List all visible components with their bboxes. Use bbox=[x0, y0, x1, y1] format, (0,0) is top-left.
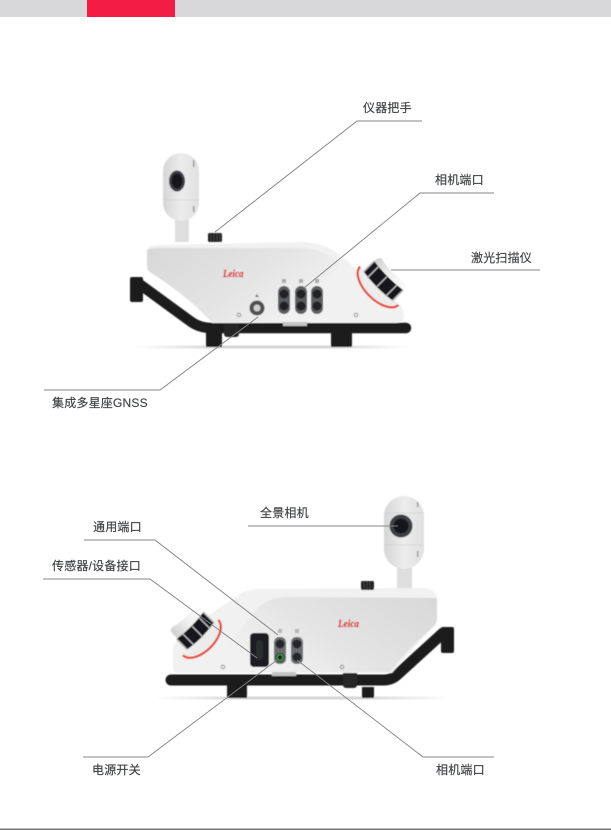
Leica logo: Leica bbox=[222, 269, 244, 280]
footer rule bbox=[0, 828, 611, 830]
callout: 传感器/设备接口 bbox=[43, 558, 257, 658]
callout: 相机端口 (top) bbox=[304, 173, 494, 288]
callout: 仪器把手 bbox=[215, 101, 422, 232]
sensor port bbox=[250, 633, 269, 667]
GNSS port bbox=[250, 294, 264, 316]
ports bbox=[274, 629, 303, 664]
callout: 传感器/设备接口: 传感器/设备接口 bbox=[52, 558, 141, 573]
knob bbox=[208, 233, 222, 242]
device: front view of instrument bbox=[155, 496, 454, 700]
panoramic camera bbox=[163, 153, 199, 242]
callout: 集成多星座GNSS: 集成多星座GNSS bbox=[52, 395, 148, 410]
body bbox=[147, 242, 404, 326]
callout: 仪器把手: 仪器把手 bbox=[363, 101, 412, 115]
callout: 全景相机: 全景相机 bbox=[260, 505, 309, 520]
callout: 相机端口 (bottom) bbox=[297, 660, 494, 777]
callout: 通用端口 bbox=[84, 520, 278, 635]
device: rear view of instrument bbox=[130, 153, 413, 348]
Leica logo: Leica bbox=[337, 619, 359, 630]
camera ports bbox=[278, 279, 323, 314]
callout: 通用端口: 通用端口 bbox=[93, 520, 142, 534]
frame bbox=[130, 277, 406, 347]
callout: 电源开关 bbox=[83, 660, 277, 777]
laser scanner bbox=[350, 252, 413, 315]
header bar bbox=[0, 0, 611, 17]
callout: 相机端口 (bottom): 相机端口 bbox=[436, 763, 485, 777]
laser scanner bbox=[164, 601, 228, 665]
body bbox=[173, 588, 437, 676]
callout: 集成多星座GNSS bbox=[44, 317, 258, 410]
callout: 电源开关: 电源开关 bbox=[92, 763, 141, 777]
panoramic camera bbox=[384, 496, 424, 592]
callout: 相机端口 (top): 相机端口 bbox=[435, 173, 484, 187]
callout: 激光扫描仪: 激光扫描仪 bbox=[471, 251, 532, 265]
frame bbox=[171, 627, 454, 698]
knob bbox=[361, 581, 374, 590]
